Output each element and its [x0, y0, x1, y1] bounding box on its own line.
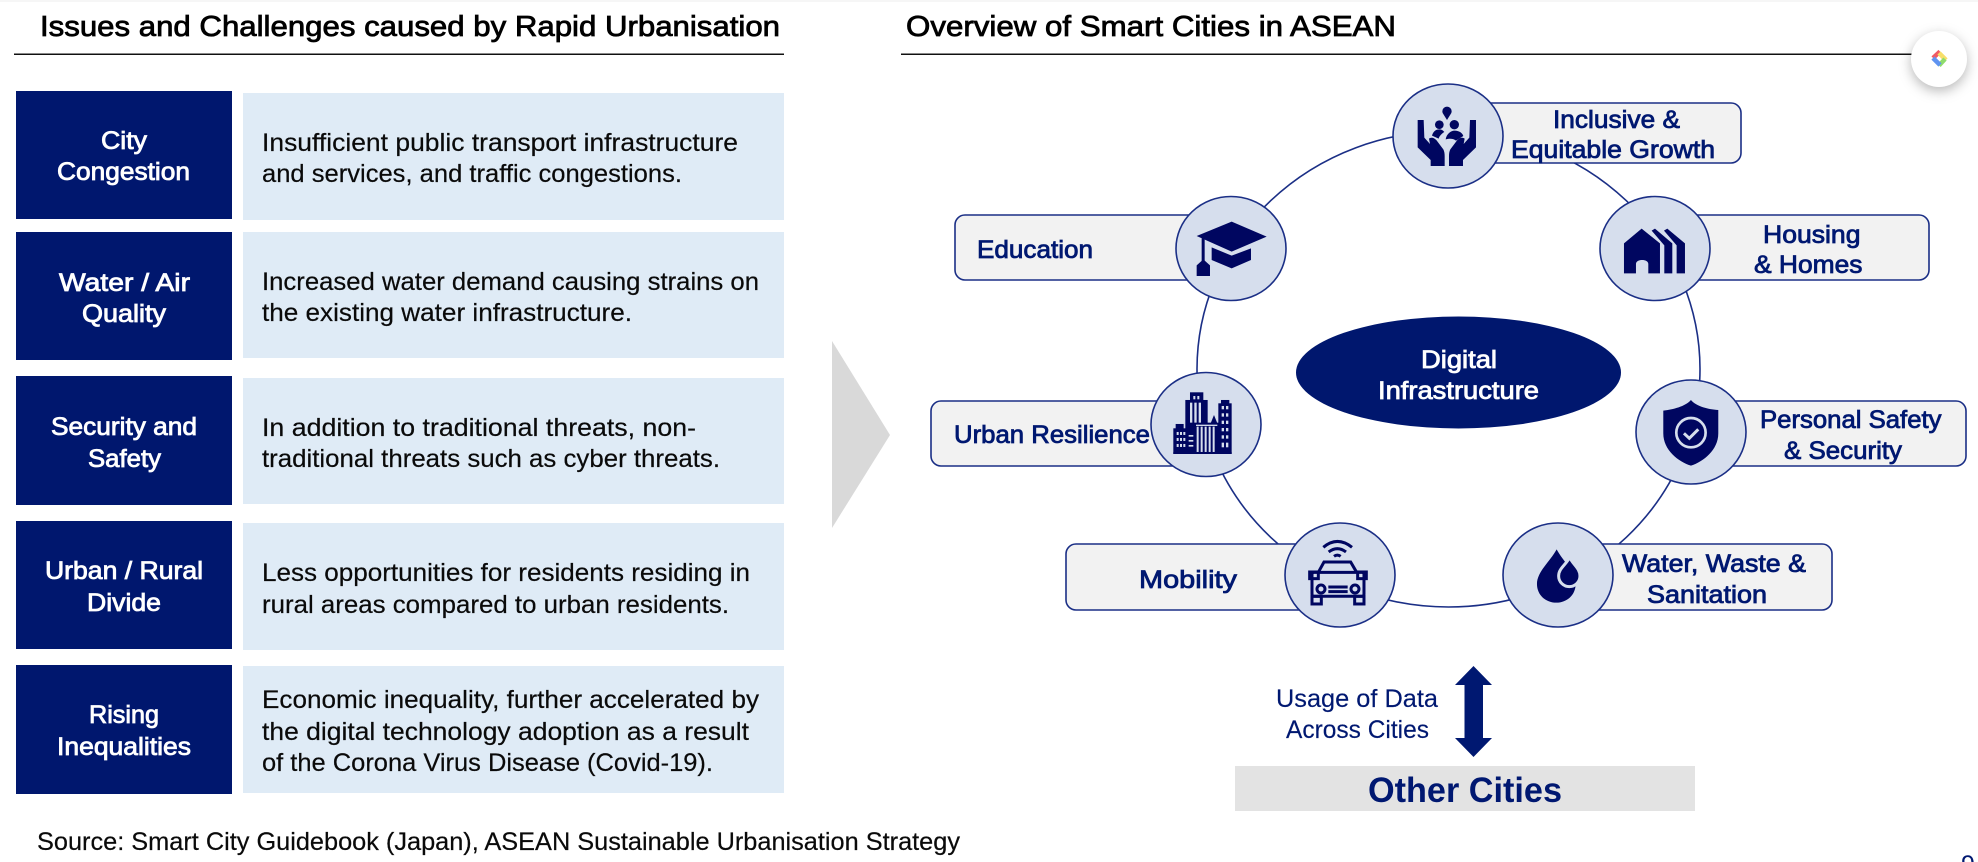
other cities box [1235, 766, 1695, 811]
panel: security and safety [16, 376, 784, 505]
node: housing and homes [1600, 196, 1929, 300]
icon: water drops [1537, 549, 1580, 603]
center ellipse: digital infrastructure [1296, 316, 1621, 428]
node: housing and homes: Housing [1763, 221, 1860, 249]
other cities box: Other Cities [1368, 771, 1562, 810]
node: personal safety and security [1636, 380, 1966, 484]
smart cities ring diagram [931, 84, 1966, 627]
label: usage of data across cities [1276, 685, 1438, 744]
icon: city buildings [1173, 392, 1232, 454]
panel: security and safety: traditional threats such as cyber threats. [262, 445, 720, 473]
panel: city congestion: Congestion [57, 158, 190, 186]
left heading: Issues and Challenges caused by Rapid Urbanisation [40, 11, 780, 43]
panel: city congestion [16, 91, 784, 220]
panel: urban rural divide: Urban / Rural [45, 557, 203, 585]
node: water waste and sanitation: Sanitation [1647, 581, 1767, 609]
panel: rising inequalities: Rising [89, 701, 159, 729]
node: education [955, 196, 1286, 300]
node: urban resilience: Urban Resilience [954, 421, 1150, 449]
panel: water and air quality: Quality [82, 300, 167, 328]
node: housing and homes: & Homes [1754, 251, 1862, 279]
panel: rising inequalities: Inequalities [57, 733, 191, 761]
panel: rising inequalities: Economic inequality, further accelerated by [262, 686, 760, 714]
node: mobility: Mobility [1139, 566, 1238, 594]
node: water waste and sanitation [1503, 523, 1832, 627]
panel: urban rural divide: rural areas compared to urban residents. [262, 591, 729, 619]
icon: houses [1624, 229, 1685, 273]
node: inclusive and equitable growth: Equitable Growth [1511, 136, 1715, 164]
node: urban resilience [931, 372, 1261, 476]
node: personal safety and security: & Security [1784, 437, 1903, 465]
panel: security and safety: Safety [88, 445, 162, 473]
label: usage of data across cities: Usage of Data [1276, 685, 1438, 713]
node: inclusive and equitable growth [1393, 84, 1741, 188]
panel: water and air quality [16, 232, 784, 360]
panel: urban rural divide: Divide [87, 589, 161, 617]
icon: hands and people [1418, 107, 1476, 166]
panel: water and air quality: the existing water infrastructure. [262, 299, 632, 327]
panel: urban rural divide: Less opportunities for residents residing in [262, 559, 750, 587]
panel: security and safety: Security and [51, 413, 197, 441]
panel: security and safety: In addition to traditional threats, non- [262, 414, 696, 442]
center ellipse: digital infrastructure: Digital [1421, 346, 1497, 374]
floating widget button [1911, 31, 1967, 87]
center ellipse: digital infrastructure: Infrastructure [1378, 377, 1539, 405]
node: personal safety and security: Personal Safety [1760, 406, 1942, 434]
node: mobility [1066, 523, 1395, 627]
panel: water and air quality: Water / Air [59, 269, 190, 297]
panel: rising inequalities: of the Corona Virus Disease (Covid-19). [262, 749, 713, 777]
panel: city congestion: Insufficient public transport infrastructure [262, 129, 738, 157]
panel: rising inequalities [16, 665, 784, 794]
arrow: data exchange double arrow [1455, 666, 1492, 757]
label: usage of data across cities: Across Cities [1286, 716, 1429, 744]
source note: Source: Smart City Guidebook (Japan), ASEAN Sustainable Urbanisation Strategy [37, 828, 961, 856]
panel: city congestion: City [101, 127, 148, 155]
icon: graduation cap [1197, 222, 1267, 276]
panel: city congestion: and services, and traffic congestions. [262, 160, 682, 188]
panel: urban rural divide [16, 521, 784, 650]
node: water waste and sanitation: Water, Waste & [1622, 550, 1806, 578]
panel: water and air quality: Increased water demand causing strains on [262, 268, 759, 296]
panel: rising inequalities: the digital technology adoption as a result [262, 718, 749, 746]
icon: connected car [1310, 541, 1366, 604]
node: inclusive and equitable growth: Inclusive & [1553, 106, 1680, 134]
right heading: Overview of Smart Cities in ASEAN [906, 11, 1396, 43]
arrow: grey transition triangle [832, 341, 890, 528]
node: education: Education [977, 236, 1093, 264]
icon: shield with check [1663, 400, 1718, 466]
